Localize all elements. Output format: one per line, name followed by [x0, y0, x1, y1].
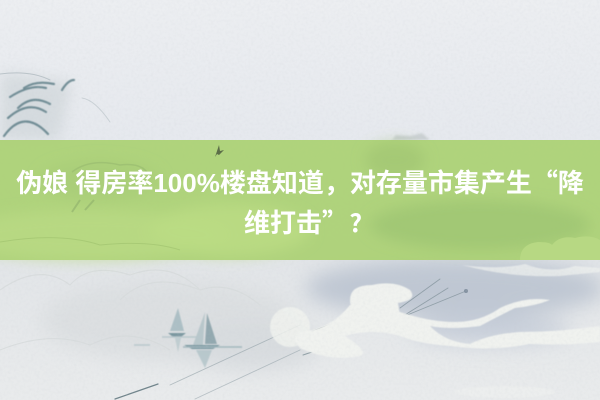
wispy cloud swirls: [0, 270, 260, 350]
band tint: [0, 142, 590, 260]
green title band: [0, 140, 600, 260]
band clouds: [520, 236, 600, 260]
sailboats: [134, 308, 242, 368]
title line 1: 伪娘 得房率100%楼盘知道，对存量市集产生“降: [16, 163, 584, 200]
diagonal lines: [115, 279, 466, 399]
flying bird: [215, 145, 224, 157]
haze behind clouds: [40, 258, 600, 370]
right faint trees: [392, 133, 430, 140]
title: [16, 163, 584, 240]
mountain sketch, top left: [0, 73, 110, 140]
auspicious clouds: [270, 264, 600, 398]
title line 2: 维打击” ?: [244, 203, 362, 240]
